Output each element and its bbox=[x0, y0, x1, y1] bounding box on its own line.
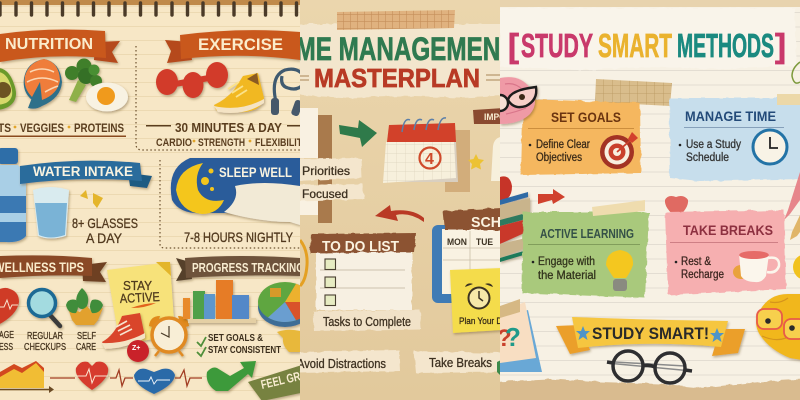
nutrition caption: PROTEINS bbox=[74, 123, 124, 135]
card: set goals bbox=[521, 99, 641, 175]
card: take breaks: Recharge bbox=[681, 269, 724, 281]
sleep caption: 7-8 HOURS NIGHTLY bbox=[184, 229, 294, 245]
card: active learning: Engage with bbox=[538, 256, 595, 268]
icon: pencils bbox=[784, 172, 800, 240]
label: important: IMPORTANT bbox=[484, 112, 534, 123]
banner: exercise bbox=[165, 30, 300, 63]
progress checklist: STAY CONSISTENT bbox=[208, 344, 281, 356]
card: take breaks bbox=[665, 210, 786, 295]
wellness tips labels: REGULAR bbox=[27, 331, 63, 342]
icon: salmon steak bbox=[24, 59, 62, 109]
card: active learning bbox=[522, 212, 649, 298]
title: study smart methods: ] bbox=[775, 27, 786, 64]
schedule table bbox=[432, 208, 549, 303]
wellness tips labels: CHECKUPS bbox=[24, 342, 66, 353]
notebook spiral binding bbox=[0, 0, 300, 15]
banner: feel great bbox=[248, 364, 319, 400]
progress checklist: SET GOALS & bbox=[208, 332, 263, 344]
title: study smart methods: STUDY bbox=[521, 27, 593, 64]
exercise caption: CARDIO bbox=[156, 137, 192, 149]
icon: dumbbells bbox=[156, 62, 228, 98]
banner: sleep well bbox=[171, 158, 300, 214]
banner: study smart bbox=[556, 317, 745, 356]
card: question marks: ? bbox=[505, 322, 521, 352]
schedule table: MON bbox=[447, 237, 467, 248]
heartbeat line bbox=[50, 370, 202, 386]
wellness tips labels: SELF bbox=[77, 331, 96, 342]
icon: yellow circle bbox=[793, 254, 800, 280]
pie chart bbox=[258, 282, 300, 330]
sticky note: plan your day bbox=[450, 268, 511, 333]
icon: second calendar bbox=[491, 137, 500, 181]
strip: priorities bbox=[296, 158, 362, 181]
tape: active learning bbox=[592, 200, 645, 216]
exercise caption: 30 MINUTES A DAY bbox=[175, 120, 282, 135]
sticky note: stay active: STAY bbox=[123, 278, 152, 293]
title: study smart methods: [ bbox=[508, 27, 519, 64]
icon: glasses bbox=[607, 351, 692, 383]
icon: red ball: Z+ bbox=[132, 345, 140, 352]
wellness tips labels bbox=[0, 330, 96, 350]
arrow: green right bbox=[339, 120, 377, 147]
icon: yellow sneaker bbox=[214, 73, 264, 113]
card: active learning: the Material bbox=[538, 270, 596, 282]
sticky note: plan your day: Plan Your Day bbox=[459, 316, 511, 327]
schedule table: SCHEDULE bbox=[471, 214, 549, 231]
card: take breaks: Rest & bbox=[681, 256, 711, 268]
icon: red heart with pulse bbox=[0, 288, 19, 325]
sticky note: stay active bbox=[107, 262, 175, 345]
panel: study smart methods bbox=[492, 0, 800, 400]
water caption: 8+ GLASSES bbox=[72, 215, 138, 231]
dotted box: exercise bbox=[136, 46, 300, 150]
torn kraft bottom bbox=[496, 379, 800, 400]
icon: measuring tape bbox=[277, 330, 300, 352]
banner: nutrition: NUTRITION bbox=[5, 36, 93, 53]
icon: calendar bbox=[383, 118, 470, 192]
icon: red ball bbox=[127, 340, 149, 362]
top kraft strip bbox=[500, 0, 800, 7]
card: manage time: Use a Study bbox=[686, 139, 741, 151]
icon: red sneaker bbox=[102, 313, 145, 349]
nutrition caption bbox=[0, 123, 126, 137]
card: take breaks: TAKE BREAKS bbox=[683, 222, 773, 238]
banner: sleep well: SLEEP WELL bbox=[219, 165, 292, 180]
card: set goals: Define Clear bbox=[536, 139, 590, 151]
exercise caption: STRENGTH bbox=[198, 137, 245, 149]
bar chart: progress bbox=[183, 280, 256, 323]
icon: star bbox=[468, 154, 484, 170]
title: masterplan: MASTERPLAN bbox=[314, 63, 480, 93]
card: question marks: ? bbox=[497, 325, 512, 352]
title: study smart methods: SMART bbox=[598, 27, 672, 64]
wellness tips labels: CARE bbox=[76, 342, 96, 353]
icon: calendar: 4 bbox=[425, 151, 434, 168]
banner: wellness tips bbox=[0, 255, 107, 282]
banner: exercise: EXERCISE bbox=[198, 35, 283, 54]
icon: blue heart bbox=[134, 369, 175, 394]
icon: avocado bbox=[0, 68, 16, 110]
area chart bbox=[0, 361, 54, 393]
header band bbox=[500, 8, 796, 70]
icon: water bottle bbox=[0, 148, 26, 242]
to do list: TO DO LIST bbox=[322, 238, 399, 255]
panel: health and wellness notebook bbox=[0, 0, 319, 400]
icon: alarm clock bbox=[149, 316, 189, 356]
progress checklist bbox=[197, 332, 281, 356]
icon: broccoli bbox=[65, 58, 102, 102]
icon: magnifying glass bbox=[28, 290, 60, 326]
schedule table: TUE bbox=[476, 237, 493, 248]
icon: pillow bbox=[224, 183, 300, 225]
icon: heart bbox=[665, 196, 688, 218]
card: manage time bbox=[669, 98, 800, 181]
strip: stay focused: Focused bbox=[302, 187, 348, 201]
plaid tape bbox=[337, 10, 455, 30]
card: manage time: Schedule bbox=[686, 152, 729, 164]
strip: take breaks: Take Breaks bbox=[429, 356, 492, 370]
icon: apple bbox=[500, 176, 512, 200]
strip: priorities: Priorities bbox=[302, 164, 350, 178]
water caption bbox=[72, 218, 138, 244]
banner: progress tracking bbox=[176, 256, 304, 281]
exercise caption bbox=[146, 123, 300, 146]
icon: self care plant bbox=[66, 288, 103, 325]
icon: orange ring edge bbox=[300, 240, 307, 286]
strip: tasks to complete: Tasks to Complete bbox=[323, 315, 411, 329]
card: question marks bbox=[497, 299, 542, 372]
card: set goals: SET GOALS bbox=[551, 109, 621, 125]
strip: stay focused bbox=[296, 184, 364, 201]
exercise caption: FLEXIBILITY bbox=[255, 137, 309, 149]
icon: yellow brain with glasses bbox=[756, 294, 800, 360]
header band bbox=[296, 24, 504, 98]
icon: pink brain with glasses bbox=[492, 77, 536, 124]
dotted box: sleep bbox=[160, 160, 300, 248]
tape: manage time bbox=[777, 94, 800, 105]
nutrition caption: VEGGIES bbox=[20, 123, 64, 135]
card: manage time: MANAGE TIME bbox=[685, 109, 776, 124]
title: study smart methods bbox=[508, 27, 786, 64]
strip: avoid distractions bbox=[296, 350, 400, 373]
banner: water intake bbox=[20, 161, 152, 188]
strip: avoid distractions: Avoid Distractions bbox=[297, 357, 386, 371]
title: time management: TIME MANAGEMENT bbox=[274, 31, 515, 67]
card: set goals: Objectives bbox=[536, 152, 582, 164]
panel: time management masterplan bbox=[274, 0, 549, 400]
arrow: red right bbox=[538, 189, 565, 204]
banner: study smart: STUDY SMART! bbox=[592, 324, 709, 343]
icon: fried egg bbox=[86, 82, 128, 112]
icon: green paper clip bbox=[792, 62, 800, 83]
icon: green check arrow bbox=[207, 361, 256, 391]
icon: red heart bbox=[76, 362, 108, 390]
banner: water intake: WATER INTAKE bbox=[33, 164, 133, 179]
icon: jump rope bbox=[271, 68, 300, 116]
banner: feel great: FEEL GREAT bbox=[260, 365, 319, 392]
icon: stack of books bbox=[500, 192, 531, 262]
strip: take breaks bbox=[414, 351, 502, 373]
water caption: A DAY bbox=[86, 230, 123, 246]
banner: progress tracking: PROGRESS TRACKING bbox=[192, 260, 304, 275]
icon: small stars bbox=[80, 190, 103, 208]
icon: green leaf edge bbox=[497, 360, 501, 376]
label: important bbox=[473, 108, 534, 124]
icon: glass of water bbox=[33, 187, 69, 238]
banner: nutrition bbox=[0, 30, 120, 63]
tape bbox=[595, 79, 672, 106]
to do list bbox=[310, 233, 416, 310]
note paper stack bbox=[296, 108, 332, 223]
arrow: red left bbox=[375, 205, 424, 222]
card: active learning: ACTIVE LEARNING bbox=[540, 226, 634, 241]
strip: tasks to complete bbox=[313, 310, 421, 331]
sticky note: stay active: ACTIVE bbox=[119, 289, 160, 306]
